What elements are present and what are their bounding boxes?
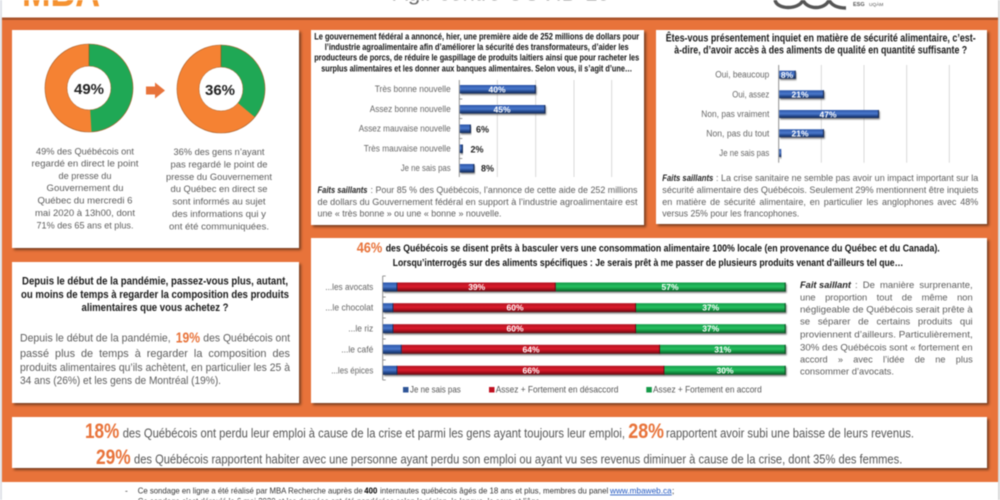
text: 19% finding: 19% — [176, 330, 200, 346]
text: employment line: 18% — [85, 420, 120, 443]
stacked bar chart: foods: 37% — [702, 324, 720, 334]
stacked bar chart: foods: 60% — [506, 303, 524, 313]
stacked bar chart: foods — [325, 276, 786, 394]
text: fait saillant: 30% des Québécois sont « fortement en — [800, 342, 973, 353]
row: riz — [383, 324, 786, 333]
text: fait saillant: proviennent d’ailleurs. Particulièrement, — [800, 329, 973, 340]
stacked bar chart: foods: 30% — [716, 365, 734, 375]
text: employment line — [85, 420, 914, 443]
text: 49% description — [32, 146, 139, 232]
heading — [357, 240, 940, 269]
panel: local consumption — [311, 238, 987, 403]
bar chart: food security concern: Non, pas du tout — [706, 128, 770, 138]
bar chart: federal aid opinion: Très bonne nouvelle — [375, 84, 451, 94]
row: café — [383, 345, 786, 354]
bar chart: food security concern: 21% — [791, 90, 809, 100]
stacked bar chart: foods: ...le café — [341, 344, 373, 354]
text: 19% finding: Depuis le début de la pandémie, — [20, 332, 171, 344]
text: 49% description: regardé en direct le point — [32, 158, 139, 170]
text: 36% description: ont été communiquées. — [169, 222, 269, 232]
heading: producteurs de porcs, de réduire le gaspillage de produits laitiers ainsi que pour racheter les — [314, 52, 639, 62]
bar chart: food security concern: Je ne sais pas — [719, 148, 770, 158]
heading: 46% — [357, 240, 382, 256]
text: fait saillant: : De manière surprenante, — [855, 280, 973, 291]
text: faits saillants: Faits saillants — [318, 185, 368, 196]
text: 36% description: pas regardé le point de — [170, 160, 268, 170]
heading: alimentaires que vous achetez ? — [82, 302, 228, 314]
footnotes: www.mbaweb.ca — [609, 486, 672, 496]
text: faits saillants — [318, 185, 638, 220]
stacked bar chart: foods: 66% — [522, 365, 540, 375]
text: fait saillant: négligeable de Québécois serait prête à — [800, 305, 973, 316]
stacked bar chart: foods: 39% — [468, 282, 486, 292]
text: household line: 29% — [96, 446, 131, 469]
panel: federal aid — [311, 30, 644, 225]
text: 19% finding: des Québécois ont — [203, 332, 290, 344]
footnotes: ; — [672, 486, 674, 496]
logo: ESG UQAM — [775, 0, 883, 8]
row: avocats — [383, 282, 786, 292]
text: employment line: des Québécois ont perdu leur emploi à cause de la crise et parmi les gens ayant toujours leur emploi, — [123, 426, 625, 440]
footnotes: - — [125, 486, 128, 496]
text: faits saillants — [662, 173, 979, 220]
text: faits saillants: : La crise sanitaire ne semble pas avoir un impact important sur la — [716, 173, 979, 184]
text: 49% description: mai 2020 à 13h00, dont — [35, 208, 135, 219]
bar chart: food security concern: Oui, beaucoup — [715, 70, 769, 80]
text: faits saillants: sécurité alimentaire des Québécois. Seulement 29% mentionnent être inquiets — [662, 185, 978, 196]
text: 36% description: 36% des gens n’ayant — [174, 147, 265, 158]
heading — [21, 276, 289, 314]
stacked bar chart: foods: ...le riz — [348, 324, 374, 334]
text: 49% description: de presse du — [58, 171, 112, 182]
donut chart: 36% — [177, 45, 265, 133]
heading — [666, 32, 976, 56]
text: faits saillants: une « très bonne » ou une « bonne » nouvelle. — [318, 208, 502, 220]
footnotes: 400 — [364, 486, 378, 496]
stacked bar chart: foods: 60% — [506, 324, 524, 334]
logo: ESG UQAM: ESG — [853, 2, 865, 8]
arrow — [146, 82, 165, 98]
legend — [403, 384, 762, 394]
legend: Je ne sais pas — [410, 384, 461, 394]
bar chart: federal aid opinion: Je ne sais pas — [401, 163, 451, 173]
bar chart: food security concern: 8% — [781, 70, 794, 80]
heading: surplus alimentaires et les donner aux banques alimentaires. Selon vous, il s’agit d’une… — [321, 62, 632, 74]
stacked bar chart: foods: 31% — [714, 344, 732, 354]
panel: food security — [656, 30, 987, 224]
text: 19% finding: produits alimentaires qu’ils achètent, en particulier les 25 à — [20, 362, 291, 374]
stacked bar chart: foods: 37% — [702, 303, 720, 313]
text: 49% description: Gouvernement du — [46, 183, 124, 194]
stacked bar chart: foods: 64% — [522, 344, 540, 354]
logo: ESG UQAM: UQÀM — [869, 1, 883, 8]
text: 36% description: du Québec en direct se — [170, 184, 268, 195]
text: 36% description: des informations qui y — [172, 209, 266, 220]
stacked bar chart: foods: ...le chocolat — [325, 303, 374, 313]
text: faits saillants: versus 25% pour les francophones. — [662, 208, 799, 220]
text: 49% description: 49% des Québécois ont — [36, 146, 134, 158]
text: fait saillant: consommer d’avocats. — [800, 367, 894, 378]
text: 49% description: 71% des 65 ans et plus. — [36, 220, 134, 232]
bar chart: food security concern: 21% — [791, 128, 809, 138]
donut chart: 49%: 49% — [74, 81, 104, 98]
text: 49% description: Québec du mercredi 6 — [38, 196, 132, 206]
heading — [314, 31, 639, 74]
legend: Assez + Fortement en désaccord — [496, 384, 618, 394]
stacked bar chart: foods: 57% — [661, 282, 679, 292]
panel: employment — [12, 417, 987, 469]
footnotes: internautes québécois âgés de 18 ans et plus, membres du panel — [380, 486, 608, 496]
bar chart: federal aid opinion: Assez mauvaise nouvelle — [359, 124, 451, 134]
bar chart: food security concern: Oui, assez — [732, 89, 770, 99]
heading: Lorsqu’interrogés sur des aliments spécifiques : Je serais prêt à me passer de plusieurs produits venant d'ailleurs tel que… — [393, 258, 903, 269]
panel: press conference donuts — [12, 30, 299, 248]
text: faits saillants: de dollars du Gouvernement fédéral en support à l’industrie agroalimentaire est — [318, 197, 638, 208]
text: 19% finding — [20, 330, 291, 387]
bar chart: federal aid opinion: Assez bonne nouvelle — [370, 104, 451, 114]
text: fait saillant: se séparer de certains produits qui — [800, 317, 973, 328]
bar chart: federal aid opinion: Très mauvaise nouvelle — [364, 144, 451, 154]
heading: l’industrie agroalimentaire afin d’améliorer la sécurité des transformateurs, d’aider les — [325, 41, 629, 52]
text: 36% description — [166, 147, 272, 232]
bar chart: federal aid opinion — [359, 80, 612, 177]
text: faits saillants: en matière de sécurité alimentaire, en particulier les anglophones avec 48% — [662, 197, 979, 208]
heading: Le gouvernement fédéral a annoncé, hier, une première aide de 252 millions de dollars pour — [314, 31, 639, 42]
text: household line — [96, 446, 902, 469]
bar chart: food security concern — [701, 65, 949, 163]
heading: Depuis le début de la pandémie, passez-vous plus, autant, — [22, 276, 288, 288]
text: 19% finding: passé plus de temps à regarder la composition des — [20, 348, 290, 360]
row: chocolat — [383, 303, 786, 312]
text: 36% description: sont informés au sujet — [172, 196, 266, 208]
text: fait saillant: Fait saillant — [800, 280, 852, 291]
text: 19% finding: 34 ans (26%) et les gens de Montréal (19%). — [20, 375, 221, 387]
text: 36% description: presse du Gouvernement — [166, 172, 272, 183]
heading: ou moins de temps à regarder la composition des produits — [21, 289, 289, 301]
bar chart: food security concern: 47% — [819, 110, 837, 120]
legend: Assez + Fortement en accord — [653, 384, 762, 394]
row: épices — [383, 366, 786, 375]
footnotes: Ce sondage en ligne a été réalisé par MBA Recherche auprès de — [138, 486, 363, 496]
text: employment line: rapportent avoir subi une baisse de leurs revenus. — [666, 426, 914, 440]
text: employment line: 28% — [628, 420, 664, 443]
bar chart: federal aid opinion: 6% — [476, 124, 489, 134]
text: fait saillant: accord » avec l’idée de ne plus — [800, 354, 973, 365]
text: faits saillants: Faits saillants — [662, 173, 713, 184]
stacked bar chart: foods: ...les épices — [331, 365, 374, 375]
bar chart: federal aid opinion: 45% — [493, 104, 511, 114]
footnotes — [125, 486, 674, 500]
text: fait saillant — [800, 280, 973, 378]
donut chart: 36%: 36% — [205, 82, 235, 99]
text: faits saillants: : Pour 85 % des Québécois, l’annonce de cette aide de 252 millions — [370, 185, 638, 196]
bar chart: food security concern: Non, pas vraiment — [701, 109, 770, 119]
panel: product composition — [12, 262, 299, 403]
bar chart: federal aid opinion: 40% — [488, 84, 506, 94]
donut chart: 49% — [45, 44, 133, 132]
text: fait saillant: une proportion tout de même non — [800, 292, 973, 303]
stacked bar chart: foods: ...les avocats — [325, 282, 374, 292]
bar chart: federal aid opinion: 8% — [481, 164, 494, 174]
bar chart: federal aid opinion: 2% — [470, 144, 484, 154]
